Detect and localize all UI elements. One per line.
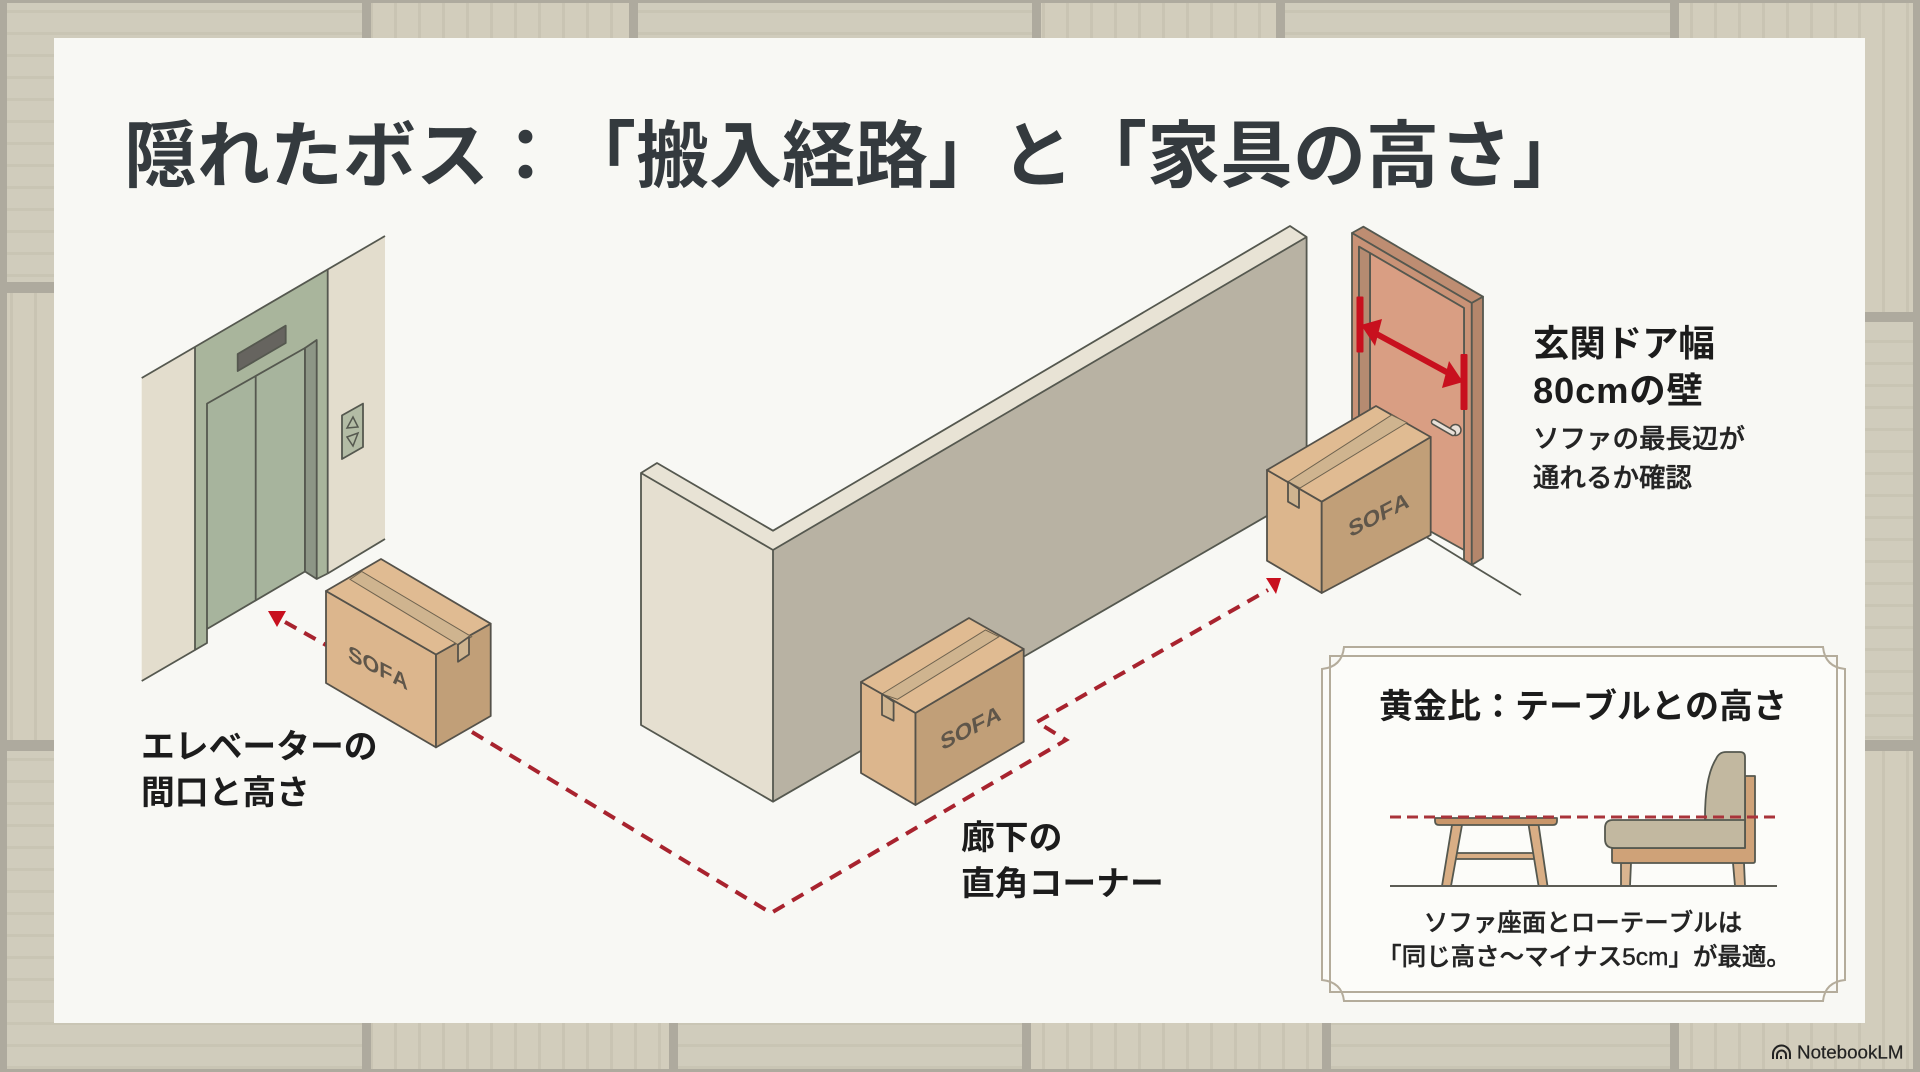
label: elevator: 間口と高さ [141,774,310,812]
route: dashed path [268,578,1281,913]
sofa side view [1605,752,1755,886]
box: sofa at elevator [326,559,491,747]
card heading: 黄金比：テーブルとの高さ [1379,687,1787,726]
title: 隠れたボス： [124,116,562,197]
NotebookLM logo: NotebookLM [1797,1042,1904,1062]
text: door note: ソファの最長辺が [1533,424,1745,454]
arrowhead: to elevator [268,611,286,627]
box: sofa at door: SOFA [1347,487,1411,542]
label: corridor corner: 廊下の [961,819,1062,857]
icon: logo arcs [1773,1046,1790,1059]
arrowhead: to door [1266,578,1281,594]
illustration: entrance door [1352,227,1521,595]
low table [1435,818,1557,886]
box: sofa at corridor: SOFA [939,700,1003,755]
text: door note: 通れるか確認 [1533,463,1692,493]
card caption: ソファ座面とローテーブルは [1424,909,1742,937]
panel: golden ratio card [1322,647,1845,1001]
box: sofa at elevator: SOFA [348,640,408,695]
illustration: corridor wall [641,226,1307,802]
label: door width: 80cmの壁 [1533,370,1704,411]
width dimension arrow [1356,296,1468,410]
seat height dashed line [1390,816,1777,818]
elevator doors [207,348,305,629]
box: sofa at corridor [861,618,1024,805]
call buttons [342,404,363,459]
card caption: 「同じ高さ〜マイナス5cm」が最適。 [1377,943,1791,971]
box: sofa at door [1267,406,1431,593]
door handle [1434,422,1461,436]
label: door width: 玄関ドア幅 [1533,323,1715,364]
label: elevator: エレベーターの [141,728,378,766]
floor indicator [238,326,286,371]
ground line [1390,885,1777,887]
label: corridor corner: 直角コーナー [961,865,1164,903]
title: 「搬入経路」と「家具の高さ」 [563,116,1585,197]
illustration: elevator [142,236,385,681]
